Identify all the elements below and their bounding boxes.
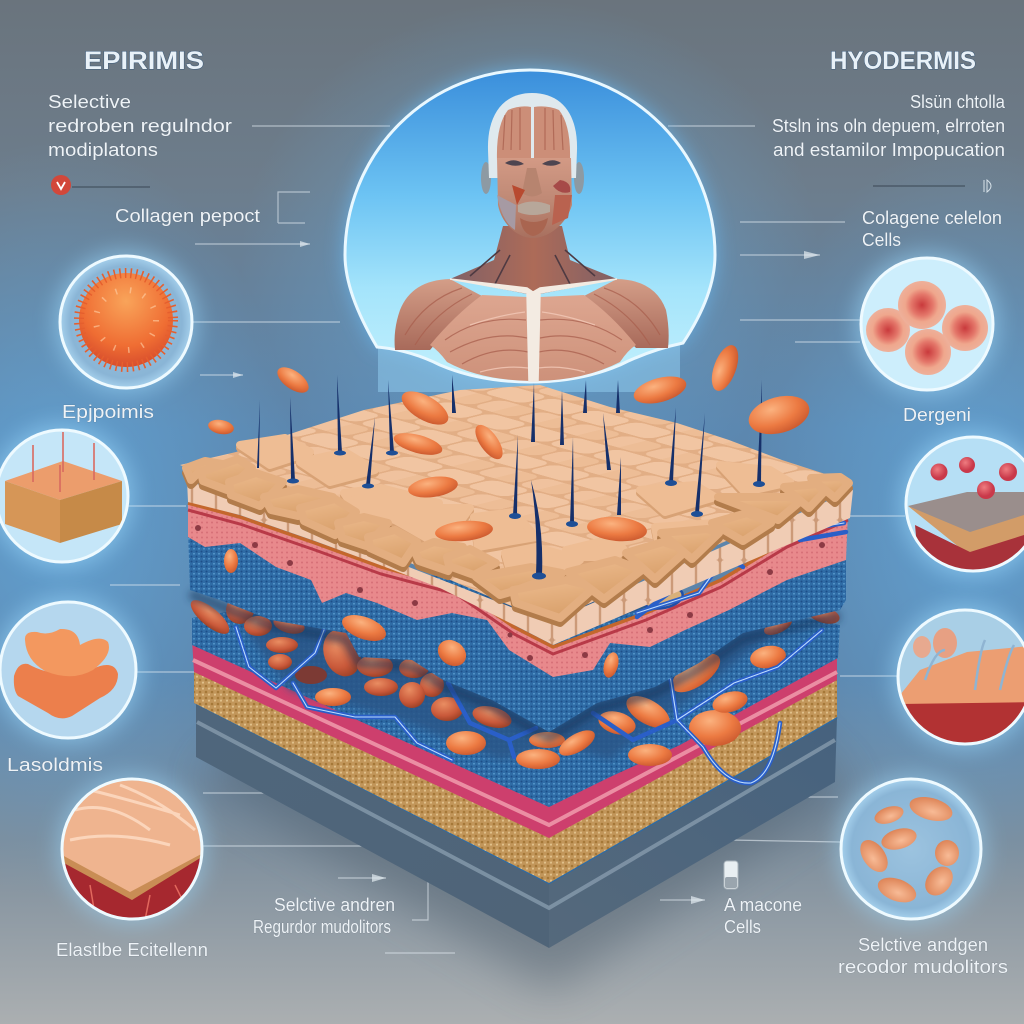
icon: anatomical head (481, 93, 584, 238)
text block: skin cells (772, 92, 1006, 160)
text block: selective modulators (48, 92, 232, 160)
red band (188, 510, 848, 654)
label: selective androgen centre (253, 895, 395, 937)
label: lasoldmis: Lasoldmis (7, 755, 103, 775)
label: selective androgen right (838, 935, 1008, 977)
fat layer (194, 670, 837, 883)
cell side strip (187, 480, 853, 645)
icon: red badge (51, 175, 71, 195)
callout: cell group (855, 252, 999, 396)
label: epjpoimis: Epjpoimis (62, 402, 154, 422)
callout: tissue with hair (892, 604, 1024, 760)
label: a macone cells (724, 895, 802, 937)
shadow under upper layer (190, 594, 840, 738)
tile surface (180, 385, 853, 622)
label: selective androgen right: recodor mudolitors (838, 957, 1008, 977)
text block: skin cells: Slsün chtolla (910, 92, 1006, 112)
label: a macone cells: Cells (724, 917, 761, 937)
icon: vial (724, 861, 738, 889)
label: elastlbe ecitellenn: Elastlbe Ecitellenn (56, 940, 208, 960)
icon: small marker (984, 180, 991, 192)
text block: skin cells: and estamilor Impopucation (773, 140, 1005, 160)
label: a macone cells: A macone (724, 895, 802, 915)
label: dergeni: Dergeni (903, 405, 971, 425)
front edge tiles (186, 459, 849, 618)
heading: epirimis: EPIRIMIS (84, 47, 204, 75)
upper pink dermis (188, 503, 848, 677)
label: selective androgen right: Selctive andgen (858, 935, 988, 955)
arrow heads (233, 241, 820, 904)
callout: ring of cells (835, 773, 987, 925)
label: colagene celelon: Colagene celelon (862, 208, 1002, 228)
label: colagene celelon (862, 208, 1002, 250)
cavity shading (230, 590, 790, 760)
text block: selective modulators: redroben regulndor (48, 116, 232, 136)
panel: head and torso dome (345, 70, 715, 392)
text block: selective modulators: modiplatons (48, 140, 158, 160)
callout: dermis section (900, 431, 1024, 580)
hairs (257, 375, 765, 580)
base plate (196, 703, 837, 948)
callout: heart-shaped cell (0, 596, 142, 744)
label: collagen pepoct: Collagen pepoct (115, 206, 260, 226)
copper line (188, 503, 848, 647)
label: colagene celelon: Cells (862, 230, 901, 250)
pink band (192, 640, 837, 838)
callout: spiky cell (54, 250, 198, 394)
callout: skin tissue (56, 773, 208, 925)
panel: skin layer block (180, 342, 853, 948)
heading: hyodermis: HYODERMIS (830, 47, 976, 75)
text block: skin cells: Stsln ins oln depuem, elrroten (772, 116, 1005, 136)
callout: epidermis cube (0, 424, 134, 568)
text block: selective modulators: Selective (48, 92, 131, 112)
floating cells (207, 342, 814, 544)
dermis spots (195, 525, 825, 661)
lower blue layer (192, 560, 840, 807)
icon: muscular torso (395, 226, 669, 381)
inner tiles (240, 438, 790, 570)
red cell cluster (186, 595, 842, 769)
upper blue layer (188, 530, 846, 732)
blue vessels lower (236, 627, 822, 783)
label: selective androgen centre: Selctive andren (274, 895, 395, 915)
blue veins upper (637, 523, 846, 617)
label: selective androgen centre: Regurdor mudolitors (253, 917, 391, 937)
embedded cells (224, 549, 685, 679)
leader lines (72, 126, 965, 953)
